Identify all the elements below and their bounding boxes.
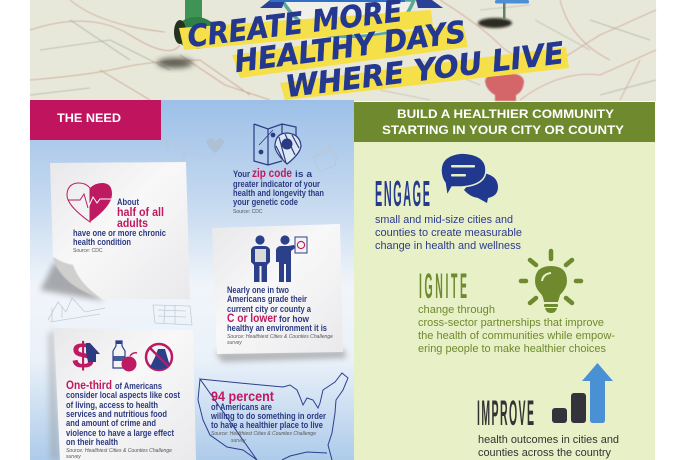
engage: change in health and wellness (375, 240, 521, 252)
pink heading box (30, 100, 161, 140)
ignite (418, 251, 615, 355)
note: half of all adults: have one or more chronic (73, 228, 166, 238)
note: one-third: violence to have a large effect (66, 428, 174, 438)
note: one-third: Source: Healthiest Cities & Counties Challenge (66, 448, 172, 454)
note: half of all adults: About (117, 197, 139, 207)
improve: counties across the country (478, 447, 612, 459)
icon: bottle and apple (113, 341, 137, 372)
US map with 94 percent: of Americans are (211, 402, 272, 412)
note: half of all adults: health condition (73, 237, 131, 247)
engage (375, 153, 522, 252)
title: WHERE YOU LIVE (284, 36, 566, 105)
note: one-third: services and nutritious food (66, 409, 167, 419)
note: half of all adults: adults (117, 218, 148, 230)
badge (260, 0, 443, 36)
note: C or lower: survey (227, 340, 242, 346)
note: one-third (48, 328, 196, 460)
ignite: change through (418, 304, 495, 316)
note: one-third: on their health (66, 437, 118, 447)
note: C or lower: Source: Healthiest Cities & Counties Challenge (227, 334, 333, 340)
yellow strip 3 (280, 47, 569, 100)
note: C or lower: healthy an environment it is (227, 323, 327, 333)
text: zip code: is a (295, 169, 313, 179)
icon: speech bubbles (441, 153, 498, 203)
US map with 94 percent: 94 percent (211, 389, 274, 404)
text: zip code: Source: CDC (233, 209, 263, 215)
green heading: STARTING IN YOUR CITY OR COUNTY (382, 125, 624, 137)
US map with 94 percent: Source: Healthiest Cities & Counties Challenge (211, 431, 316, 437)
text: zip code: Your (233, 169, 250, 179)
panel: build a healthier community (354, 102, 655, 460)
icon: green pin (174, 0, 217, 49)
pink heading box: THE NEED (57, 111, 121, 125)
yellow strip 2 (232, 24, 468, 78)
note: C or lower: Nearly one in two (227, 285, 289, 295)
engage: ENGAGE (375, 173, 430, 214)
note: C or lower (212, 224, 346, 362)
ignite: the health of communities while empow- (418, 330, 615, 342)
US map with 94 percent: survey (231, 438, 246, 444)
decorative sketches (48, 136, 338, 325)
green heading: BUILD A HEALTHIER COMMUNITY (397, 109, 614, 121)
ignite: ering people to make healthier choices (418, 343, 606, 355)
engage: counties to create measurable (375, 227, 522, 239)
yellow strip 1 (179, 10, 433, 50)
engage: small and mid-size cities and (375, 214, 513, 226)
icon: map and pin (254, 124, 301, 165)
note: one-third: consider local aspects like cost (66, 390, 180, 400)
improve (477, 363, 619, 459)
US map with 94 percent: willing to do something in order (210, 411, 326, 421)
text: zip code: greater indicator of your (233, 179, 320, 189)
ignite: cross-sector partnerships that improve (418, 317, 604, 329)
note: C or lower: C or lower (227, 311, 277, 325)
icon: light bulb (521, 251, 581, 313)
note: half of all adults: half of all (117, 207, 164, 219)
icon: blue pin (495, 0, 529, 20)
note: one-third: of Americans (115, 381, 162, 391)
green heading (354, 102, 655, 142)
note: C or lower: Americans grade their (227, 294, 307, 304)
icon: dollar and house: $ (72, 335, 94, 376)
icon: heart (67, 183, 112, 222)
improve: IMPROVE (477, 395, 534, 433)
icon: bars and arrow (552, 363, 613, 423)
note: one-third: survey (66, 454, 81, 460)
note: C or lower: current city or county a (227, 304, 312, 314)
text: zip code: your genetic code (233, 197, 298, 207)
text: zip code (233, 168, 324, 215)
title: HEALTHY DAYS (232, 15, 468, 80)
note: one-third: One-third (66, 380, 112, 392)
icon: red pin (485, 73, 524, 101)
note: half of all adults: Source: CDC (73, 248, 103, 254)
note: half of all adults (40, 162, 190, 301)
icon: no crime (146, 344, 172, 370)
icon: people with report card (251, 235, 307, 282)
improve: health outcomes in cities and (478, 434, 619, 446)
note: one-third: of living, access to health (66, 400, 158, 410)
US map with 94 percent (198, 373, 348, 460)
text: zip code: zip code (252, 168, 292, 180)
map banner (30, 0, 656, 101)
title (179, 0, 569, 105)
text: zip code: health and longevity than (233, 188, 324, 198)
note: one-third: and amount of crime and (66, 418, 156, 428)
note: C or lower: for how (279, 314, 310, 324)
ignite: IGNITE (419, 268, 467, 306)
US map with 94 percent: to have a healthier place to live (211, 420, 323, 430)
panel: the need (30, 100, 354, 460)
